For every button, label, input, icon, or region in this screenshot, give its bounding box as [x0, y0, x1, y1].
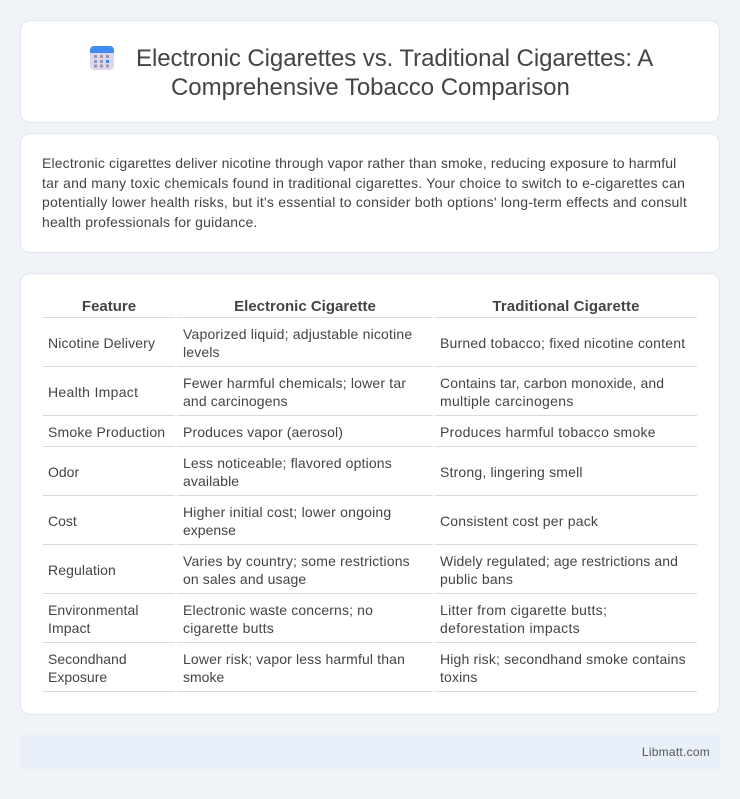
comparison table: Burned tobacco; fixed nicotine content	[440, 335, 685, 351]
row: Health Impact: Health Impact	[48, 384, 138, 400]
row: Environmental Impact: Impact	[48, 620, 90, 636]
row: Regulation: Regulation	[48, 562, 116, 578]
comparison table: Litter from cigarette butts;	[440, 602, 607, 618]
row: Secondhand Exposure: Secondhand	[48, 651, 127, 667]
comparison table: deforestation impacts	[440, 620, 580, 636]
intro text: potentially lower health risks, but it's essential to consider both options' long-term effects and consult	[42, 194, 687, 210]
comparison table: High risk; secondhand smoke contains	[440, 651, 686, 667]
row: Secondhand Exposure	[48, 651, 127, 685]
footer text: Libmatt.com	[642, 745, 710, 759]
header: Electronic Cigarette: Electronic Cigarette	[234, 298, 376, 315]
comparison table: Contains tar, carbon monoxide, and	[440, 375, 664, 391]
table card	[20, 273, 720, 715]
comparison table: Higher initial cost; lower ongoing	[183, 504, 391, 520]
comparison table: expense	[183, 522, 236, 538]
header: Feature: Feature	[82, 298, 136, 315]
comparison table: and carcinogens	[183, 393, 288, 409]
comparison table: Strong, lingering smell	[440, 464, 583, 480]
comparison table: Vaporized liquid; adjustable nicotine	[183, 326, 412, 342]
intro text: Electronic cigarettes deliver nicotine through vapor rather than smoke, reducing exposure to harmful	[42, 155, 676, 171]
comparison table: Produces harmful tobacco smoke	[440, 424, 656, 440]
icon: calendar grid	[90, 46, 114, 70]
header: Traditional Cigarette: Traditional Cigarette	[492, 298, 640, 315]
intro text	[42, 155, 687, 230]
row: Secondhand Exposure: Exposure	[48, 669, 107, 685]
row: Odor: Odor	[48, 464, 79, 480]
comparison table: levels	[183, 344, 220, 360]
comparison table: toxins	[440, 669, 477, 685]
comparison table: Less noticeable; flavored options	[183, 455, 392, 471]
comparison table: smoke	[183, 669, 224, 685]
comparison table: Electronic waste concerns; no	[183, 602, 373, 618]
row: Environmental Impact: Environmental	[48, 602, 139, 618]
comparison table: available	[183, 473, 239, 489]
row: Environmental Impact	[48, 602, 139, 636]
title: Comprehensive Tobacco Comparison	[171, 74, 570, 101]
intro text: health professionals for guidance.	[42, 214, 257, 230]
comparison table: on sales and usage	[183, 571, 306, 587]
row: Nicotine Delivery: Nicotine Delivery	[48, 335, 155, 351]
comparison table: Consistent cost per pack	[440, 513, 598, 529]
comparison table: cigarette butts	[183, 620, 274, 636]
comparison table: Lower risk; vapor less harmful than	[183, 651, 405, 667]
comparison table: Produces vapor (aerosol)	[183, 424, 343, 440]
title card	[20, 20, 720, 123]
title: Electronic Cigarettes vs. Traditional Cigarettes: A	[136, 45, 653, 72]
footer bar	[20, 735, 720, 769]
comparison table: Widely regulated; age restrictions and	[440, 553, 678, 569]
title	[136, 45, 654, 101]
row: Cost: Cost	[48, 513, 77, 529]
comparison table: public bans	[440, 571, 513, 587]
comparison table: Varies by country; some restrictions	[183, 553, 410, 569]
intro text: tar and many toxic chemicals found in traditional cigarettes. Your choice to switch to e-cigarettes can	[42, 175, 685, 191]
comparison table: Fewer harmful chemicals; lower tar	[183, 375, 406, 391]
row: Smoke Production: Smoke Production	[48, 424, 165, 440]
comparison table: multiple carcinogens	[440, 393, 574, 409]
intro card	[20, 133, 720, 253]
